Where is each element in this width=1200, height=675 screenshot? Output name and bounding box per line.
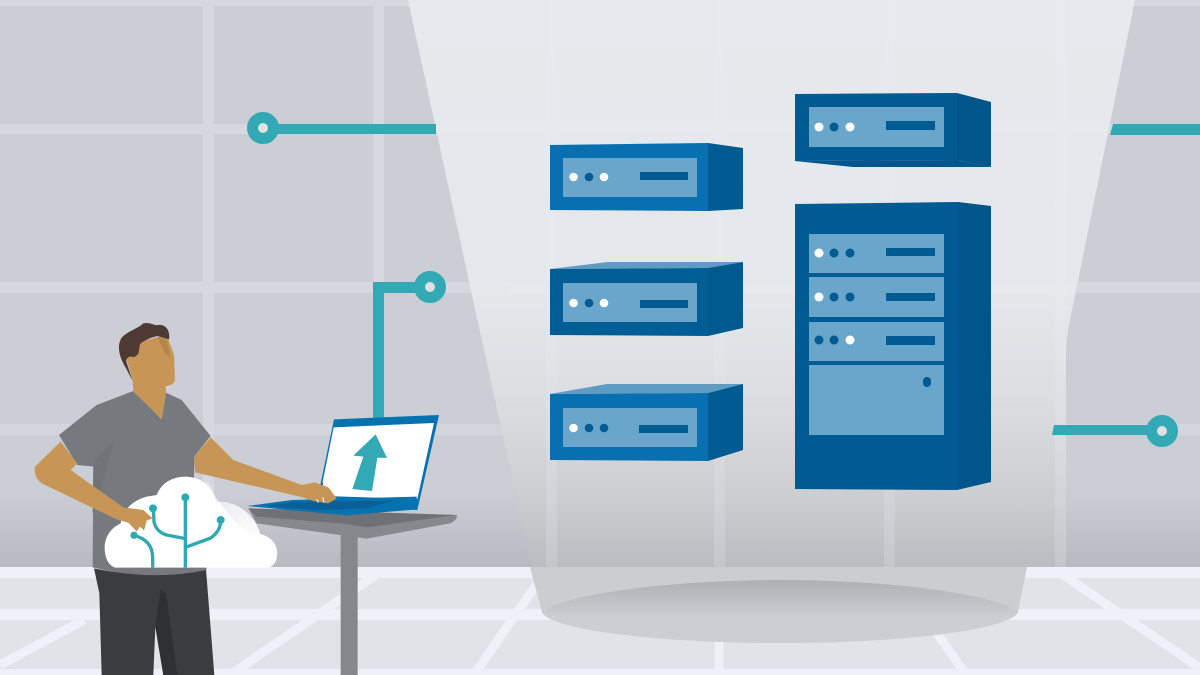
laptop bbox=[247, 415, 439, 515]
server: top right bbox=[795, 93, 991, 167]
server tower rack bbox=[795, 202, 991, 490]
icon: upload arrow bbox=[352, 434, 387, 491]
server: bottom left bbox=[550, 384, 743, 461]
light beam on wall bbox=[408, 0, 1135, 567]
hair bbox=[119, 323, 169, 381]
cloud icon with circuit tree bbox=[105, 477, 277, 568]
rack door with knob bbox=[809, 365, 944, 435]
rack unit 3 bbox=[809, 322, 944, 361]
light beam pool on floor bbox=[530, 567, 1027, 643]
connector: upper left bbox=[252, 118, 436, 138]
person bbox=[35, 323, 337, 675]
server: middle left bbox=[550, 262, 743, 336]
trousers bbox=[94, 568, 214, 675]
floor with perspective grid bbox=[0, 567, 1200, 675]
shirt bbox=[59, 391, 211, 575]
arm reaching to laptop bbox=[194, 437, 337, 503]
rack unit 1 bbox=[809, 234, 944, 273]
connector: above laptop bbox=[378, 276, 440, 420]
connector: lower right bbox=[1052, 420, 1172, 442]
connector: upper right bbox=[1110, 124, 1200, 135]
rack unit 2 bbox=[809, 277, 944, 317]
floor ellipse shadow bbox=[542, 580, 1018, 643]
server: top left bbox=[550, 143, 743, 211]
arm resting on cloud bbox=[35, 442, 153, 532]
head and neck bbox=[127, 335, 175, 419]
table bbox=[248, 508, 457, 675]
